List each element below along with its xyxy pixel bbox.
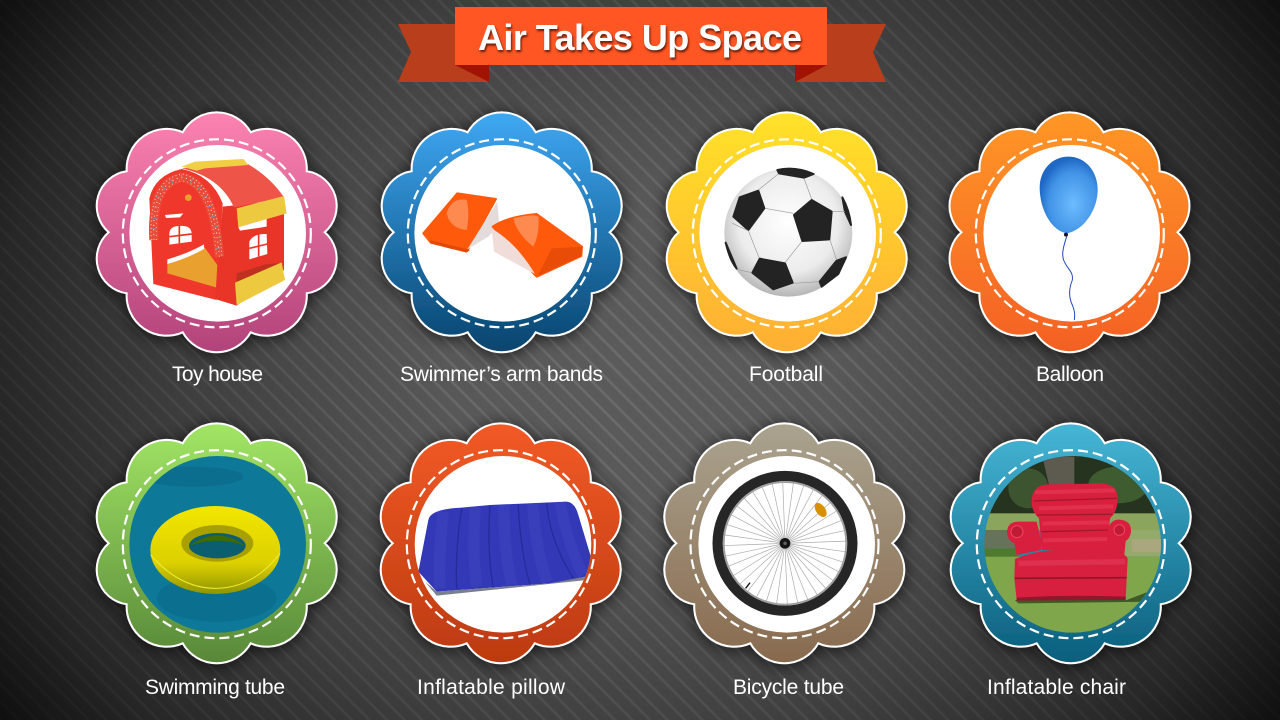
icon: football (724, 169, 852, 297)
card: bicycle tube (664, 423, 904, 699)
card: inflatable chair (951, 423, 1191, 699)
label: inflatable chair: Inflatable chair (987, 676, 1126, 699)
label: swimming tube: Swimming tube (145, 676, 285, 699)
card: balloon (950, 112, 1189, 386)
icon: arm bands (423, 193, 583, 277)
label: inflatable pillow: Inflatable pillow (417, 676, 566, 699)
title ribbon: Air Takes Up Space (478, 17, 802, 58)
label: toy house: Toy house (172, 363, 263, 386)
card: toy house (97, 112, 337, 386)
icon: balloon (1040, 157, 1098, 320)
card: swimmer's arm bands (382, 112, 622, 386)
card: inflatable pillow (381, 423, 621, 699)
icon: bicycle wheel (718, 476, 852, 611)
label: balloon: Balloon (1036, 363, 1104, 386)
icon: pillow (418, 502, 593, 596)
image: red chair on lawn (982, 455, 1163, 637)
card: football (667, 112, 907, 386)
image: tube on water (129, 456, 306, 633)
label: bicycle tube: Bicycle tube (733, 676, 844, 699)
title ribbon (398, 7, 886, 82)
card: swimming tube (97, 423, 337, 699)
label: swimmer's arm bands: Swimmer’s arm bands (400, 363, 603, 386)
icon: toy house (149, 159, 287, 306)
label: football: Football (749, 363, 823, 386)
